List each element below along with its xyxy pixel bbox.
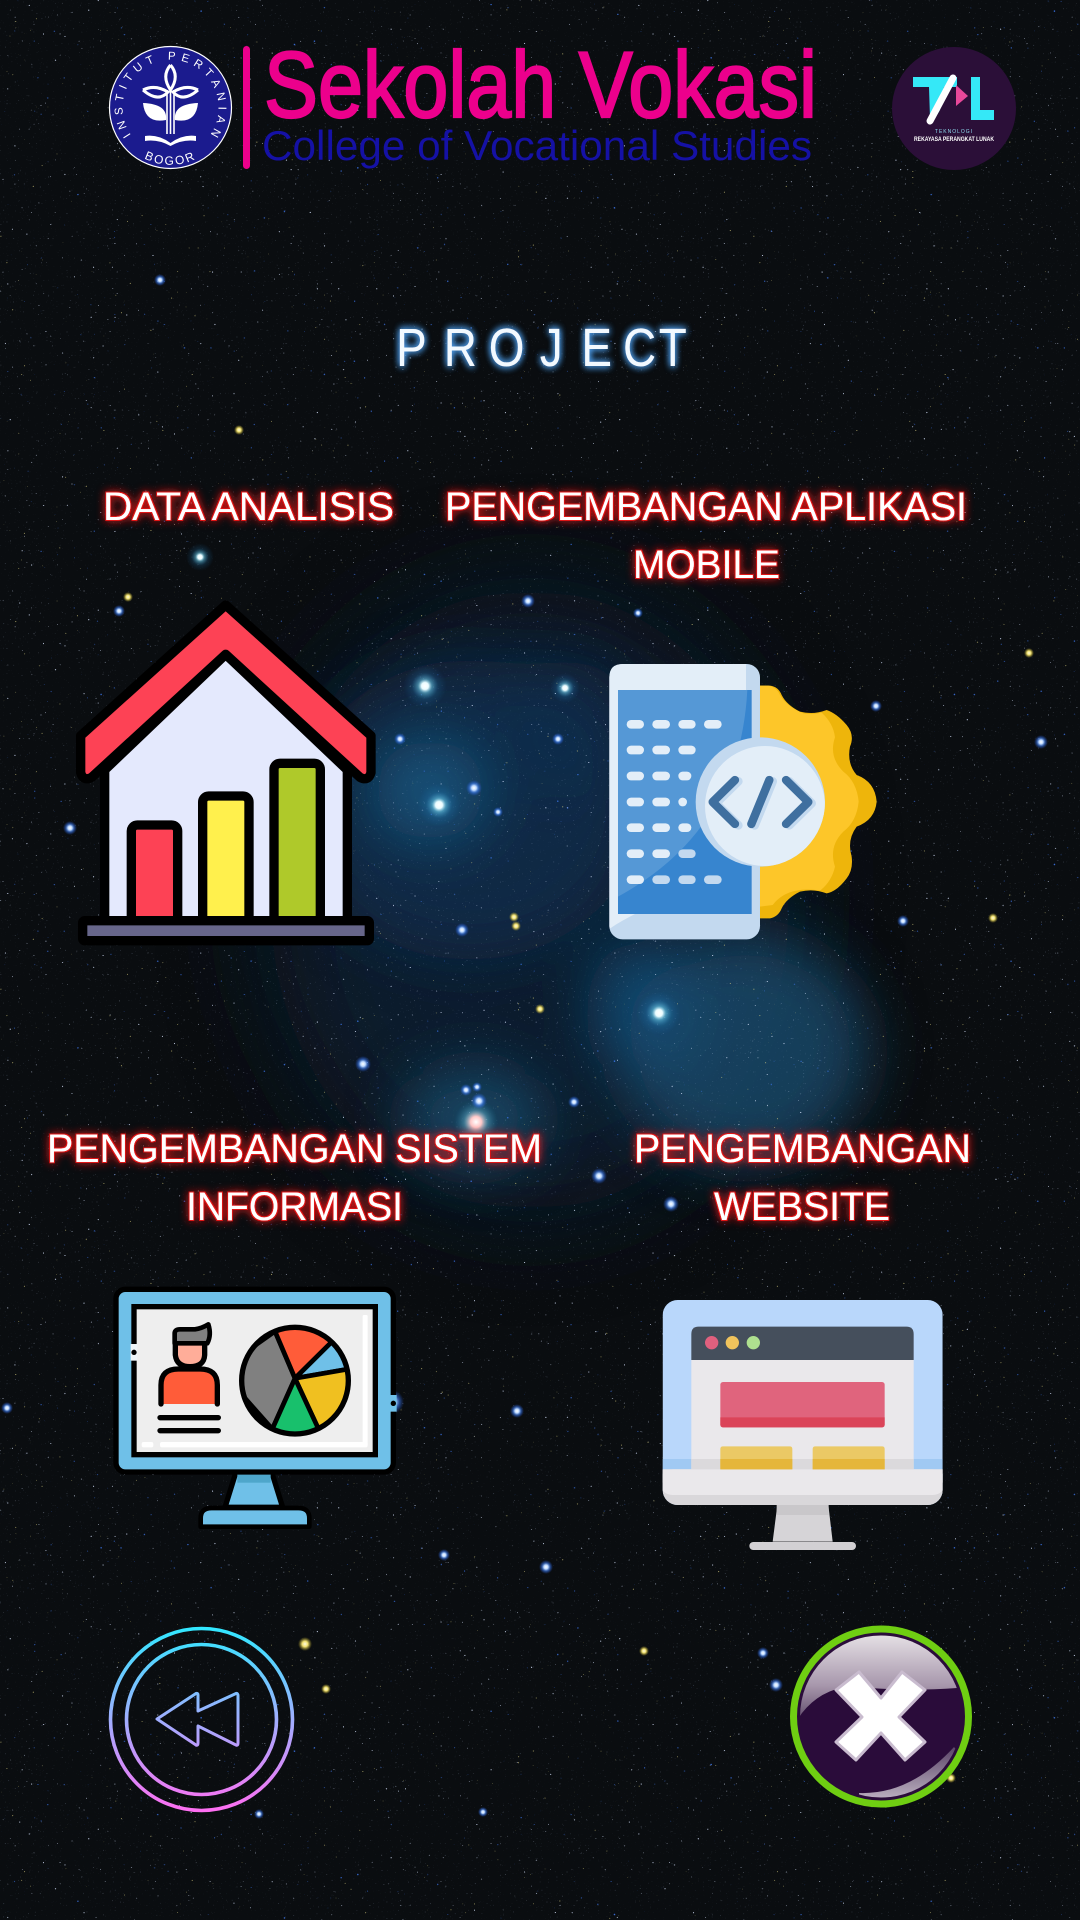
button: close	[790, 1629, 970, 1810]
logo: IPB seal	[108, 46, 232, 170]
heading: Sekolah Vokasi: Sekolah Vokasi	[264, 32, 817, 137]
label: PENGEMBANGAN APLIKASI MOBILE: MOBILE	[633, 543, 780, 587]
label: DATA ANALISIS: DATA ANALISIS	[103, 485, 394, 529]
label: PENGEMBANGAN APLIKASI MOBILE: PENGEMBANGAN APLIKASI	[445, 485, 967, 529]
logo divider bar	[243, 46, 250, 169]
icon: information system monitor	[116, 1289, 397, 1527]
label: PENGEMBANGAN APLIKASI MOBILE	[445, 485, 967, 587]
title: PROJECT: PROJECT	[396, 318, 687, 378]
label: PENGEMBANGAN SISTEM INFORMASI	[47, 1127, 542, 1229]
button: back	[110, 1628, 292, 1810]
logo: TPL: TEKNOLOGI	[935, 129, 973, 135]
subheading: College of Vocational Studies: College of Vocational Studies	[262, 122, 812, 169]
logo: IPB seal: INSTITUT PERTANIAN	[114, 52, 226, 138]
label: PENGEMBANGAN SISTEM INFORMASI: INFORMASI	[186, 1185, 403, 1229]
label: PENGEMBANGAN WEBSITE: PENGEMBANGAN	[634, 1127, 971, 1171]
icon: house with bar chart	[81, 605, 371, 941]
label: PENGEMBANGAN WEBSITE	[634, 1127, 971, 1229]
logo: IPB seal: BOGOR	[144, 151, 194, 165]
label: PENGEMBANGAN WEBSITE: WEBSITE	[714, 1185, 890, 1229]
icon: mobile app development	[609, 664, 877, 939]
icon: website monitor	[659, 1300, 946, 1550]
label: PENGEMBANGAN SISTEM INFORMASI: PENGEMBANGAN SISTEM	[47, 1127, 542, 1171]
logo: TPL	[892, 47, 1016, 170]
logo: TPL: REKAYASA PERANGKAT LUNAK	[914, 136, 994, 143]
